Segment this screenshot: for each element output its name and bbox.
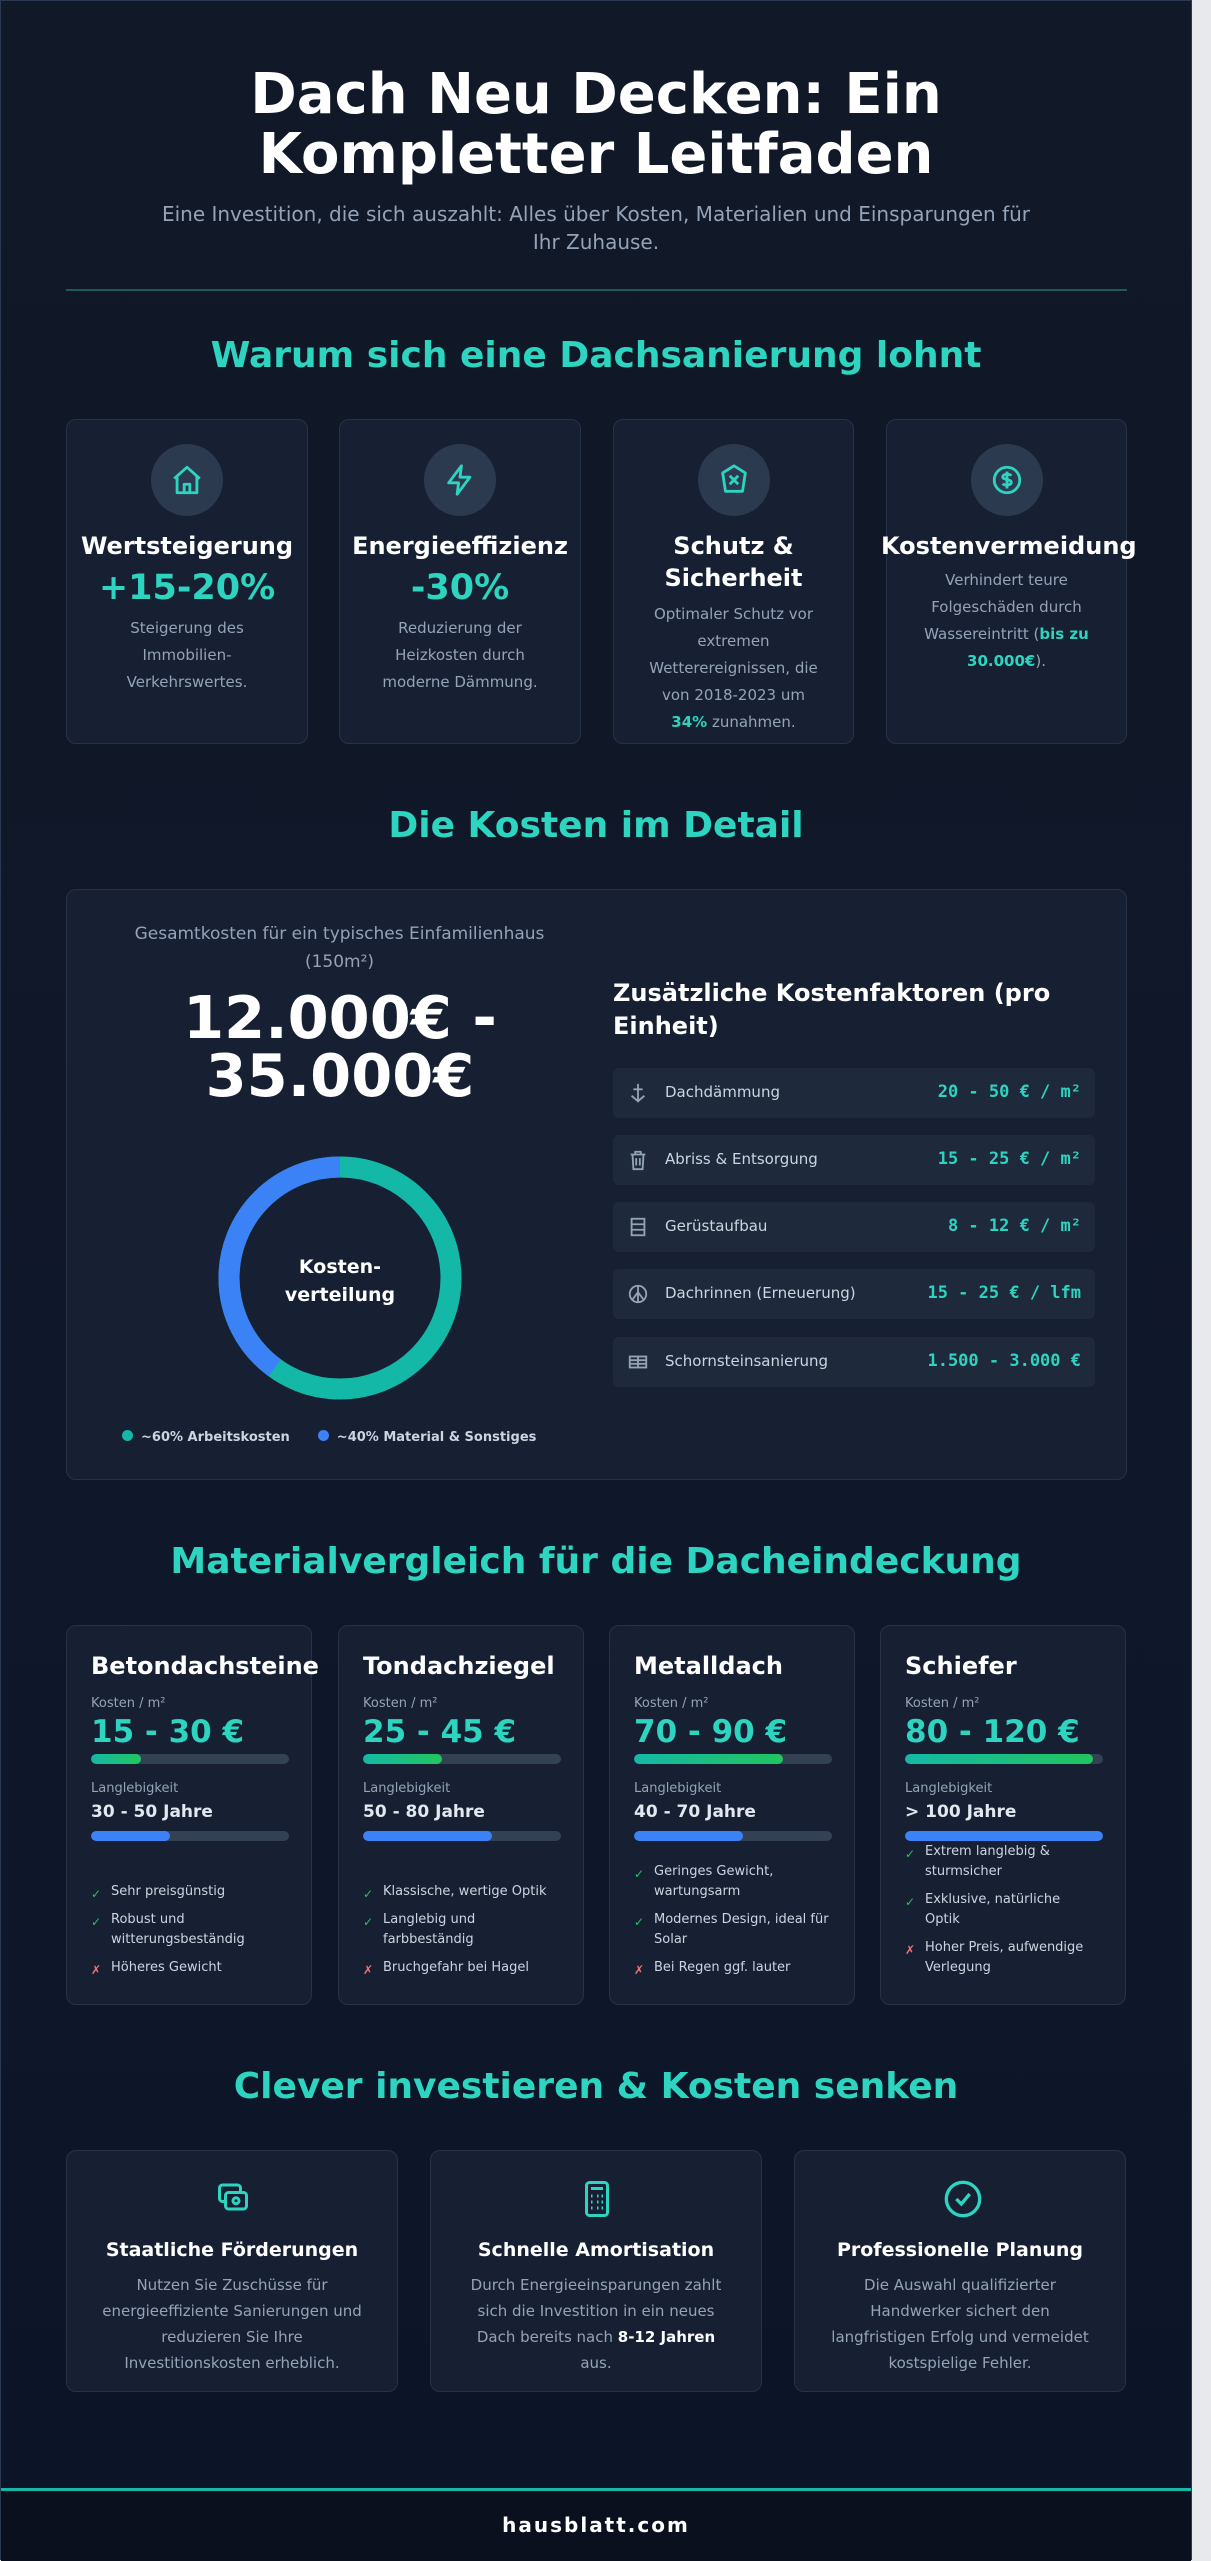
card: Tondachziegel: Kosten / m² bbox=[363, 1696, 437, 1711]
card: Schutz bbox=[613, 419, 854, 744]
card: Schutz: 34% zunahmen. bbox=[671, 713, 796, 731]
card: Wertsteigerung: Steigerung des Immobilien-Verkehrswertes. bbox=[127, 619, 247, 691]
card: Metalldach: Kosten / m² bbox=[634, 1696, 708, 1711]
card: Schiefer: Extrem langlebig & sturmsicher bbox=[925, 1844, 1050, 1879]
row: Abriss: Abriss & Entsorgung bbox=[665, 1150, 818, 1168]
card: Energieeffizienz: Energieeffizienz bbox=[352, 532, 568, 560]
panel: costs bbox=[66, 889, 1127, 1480]
card: Förderungen: Staatliche Förderungen bbox=[106, 2239, 358, 2261]
card: Schiefer: Hoher Preis, aufwendige Verlegung bbox=[925, 1940, 1083, 1975]
card: Energieeffizienz: Reduzierung der Heizkosten durch moderne Dämmung. bbox=[382, 619, 538, 691]
card: Schiefer: ✓ bbox=[905, 1895, 915, 1909]
card: Energieeffizienz bbox=[339, 419, 581, 744]
card: Förderungen: Investitionskosten erheblich. bbox=[124, 2354, 340, 2372]
card: Tondachziegel: ✗ bbox=[363, 1963, 373, 1977]
card: Metalldach bbox=[609, 1625, 855, 2005]
icon: money bbox=[218, 2184, 248, 2210]
card: Tondachziegel: Tondachziegel bbox=[363, 1652, 555, 1680]
card: Betondachsteine: ✓ bbox=[91, 1887, 101, 1901]
card: Tondachziegel: Klassische, wertige Optik bbox=[383, 1884, 546, 1899]
big number: 12.000€ - bbox=[183, 983, 497, 1052]
card: Schiefer: Schiefer bbox=[905, 1652, 1017, 1680]
card: Planung: Professionelle Planung bbox=[837, 2239, 1083, 2261]
card: Förderungen: Nutzen Sie Zuschüsse für energieeffiziente Sanierungen und bbox=[102, 2276, 362, 2320]
card: Amortisation: Schnelle Amortisation bbox=[478, 2239, 714, 2261]
row: Dachdämmung: 20 - 50 € / m² bbox=[938, 1082, 1081, 1102]
row: Schornstein: Schornsteinsanierung bbox=[665, 1352, 828, 1370]
icon: check circle bbox=[944, 2180, 982, 2218]
heading: extra factors: Zusätzliche Kostenfaktoren (pro bbox=[613, 979, 1050, 1007]
row: Dachrinnen: Dachrinnen (Erneuerung) bbox=[665, 1284, 856, 1302]
legend: ~60% Arbeitskosten ~40% Material & Sonstiges bbox=[141, 1430, 536, 1445]
card: Metalldach: Langlebigkeit bbox=[634, 1781, 721, 1796]
icon: dollar bbox=[970, 444, 1042, 516]
title bbox=[250, 62, 942, 187]
icon: bolt bbox=[424, 444, 496, 516]
card: Betondachsteine: Kosten / m² bbox=[91, 1696, 165, 1711]
row: Gerüst bbox=[613, 1202, 1095, 1252]
footer: hausblatt.com bbox=[502, 2513, 690, 2537]
donut chart: verteilung bbox=[285, 1284, 395, 1306]
total costs text: Gesamtkosten für ein typisches Einfamilienhaus (150m²) bbox=[135, 924, 544, 972]
title: Dach Neu Decken: Ein bbox=[250, 62, 942, 127]
card: Schiefer: > 100 Jahre bbox=[905, 1802, 1016, 1822]
card: Metalldach: ✓ bbox=[634, 1867, 644, 1881]
card: Amortisation: Durch Energieeinsparungen zahlt sich die Investition in ein neues Dach bereits nach 8-12 Jahren aus. bbox=[471, 2276, 721, 2372]
card: Betondachsteine: ✗ bbox=[91, 1963, 101, 1977]
card: Schutz: Optimaler Schutz vor extremen Wetterereignissen, die von 2018-2023 um bbox=[649, 605, 818, 704]
row: Schornstein: 1.500 - 3.000 € bbox=[927, 1351, 1081, 1371]
card: Schutz: Schutz & bbox=[673, 532, 794, 560]
card: Schiefer: ✗ bbox=[905, 1943, 915, 1957]
subtitle: Eine Investition, die sich auszahlt: Alles über Kosten, Materialien und Einsparungen für Ihr Zuhause. bbox=[162, 202, 1030, 254]
row: Gerüst: 8 - 12 € / m² bbox=[948, 1216, 1081, 1236]
card: Schiefer: ✓ bbox=[905, 1847, 915, 1861]
card: Metalldach: Bei Regen ggf. lauter bbox=[654, 1960, 790, 1975]
card: Planung: Die Auswahl qualifizierter Handwerker sichert den langfristigen Erfolg und vermeidet kostspielige Fehler. bbox=[831, 2276, 1089, 2372]
heading: extra factors: Einheit) bbox=[613, 1012, 719, 1040]
card: Tondachziegel: Bruchgefahr bei Hagel bbox=[383, 1960, 529, 1975]
row: Gerüst: Gerüstaufbau bbox=[665, 1217, 767, 1235]
card: Metalldach: 70 - 90 € bbox=[634, 1714, 787, 1750]
donut chart: Kosten- bbox=[299, 1256, 381, 1278]
row: Dachrinnen: 15 - 25 € / lfm bbox=[927, 1283, 1081, 1303]
card: Betondachsteine: Langlebigkeit bbox=[91, 1781, 178, 1796]
card: Wertsteigerung bbox=[66, 419, 308, 744]
card: Metalldach: ✓ bbox=[634, 1915, 644, 1929]
card: Tondachziegel: 25 - 45 € bbox=[363, 1714, 516, 1750]
heading: extra factors bbox=[613, 979, 1050, 1040]
title: Kompletter Leitfaden bbox=[259, 122, 933, 187]
row: Abriss bbox=[613, 1135, 1095, 1185]
row: Dachdämmung: Dachdämmung bbox=[665, 1083, 780, 1101]
footer bbox=[1, 2488, 1191, 2561]
card: Amortisation bbox=[430, 2150, 762, 2392]
card: Betondachsteine: 30 - 50 Jahre bbox=[91, 1802, 213, 1822]
card: Kostenvermeidung: Verhindert teure Folgeschäden durch Wassereintritt (bis zu 30.000€). bbox=[924, 571, 1089, 670]
card: Förderungen: reduzieren Sie Ihre bbox=[161, 2328, 303, 2346]
card: Förderungen bbox=[66, 2150, 398, 2392]
row: Dachdämmung bbox=[613, 1068, 1095, 1118]
row: Abriss: 15 - 25 € / m² bbox=[938, 1149, 1081, 1169]
card: Metalldach: Metalldach bbox=[634, 1652, 783, 1680]
card: Tondachziegel bbox=[338, 1625, 584, 2005]
card: Wertsteigerung: +15-20% bbox=[99, 568, 275, 608]
row: Schornstein bbox=[613, 1337, 1095, 1387]
heading: Clever investieren: Clever investieren & Kosten senken bbox=[234, 2066, 958, 2107]
card: Betondachsteine: Höheres Gewicht bbox=[111, 1960, 222, 1975]
card: Metalldach: Geringes Gewicht, wartungsarm bbox=[654, 1864, 773, 1899]
card: Schiefer: Optik bbox=[925, 1912, 960, 1927]
card: Betondachsteine: Robust und witterungsbeständig bbox=[111, 1912, 245, 1947]
card: Schiefer: 80 - 120 € bbox=[905, 1714, 1080, 1750]
card: Tondachziegel: ✓ bbox=[363, 1915, 373, 1929]
card: Metalldach: 40 - 70 Jahre bbox=[634, 1802, 756, 1822]
card: Energieeffizienz: -30% bbox=[411, 568, 509, 608]
card: Tondachziegel: farbbeständig bbox=[383, 1932, 474, 1947]
card: Tondachziegel: Langlebigkeit bbox=[363, 1781, 450, 1796]
card: Metalldach: Modernes Design, ideal für Solar bbox=[654, 1912, 829, 1947]
row: Dachrinnen bbox=[613, 1269, 1095, 1319]
card: Planung bbox=[794, 2150, 1126, 2392]
card: Tondachziegel: 50 - 80 Jahre bbox=[363, 1802, 485, 1822]
card: Schiefer: Kosten / m² bbox=[905, 1696, 979, 1711]
card: Betondachsteine: Sehr preisgünstig bbox=[111, 1884, 225, 1899]
card: Schiefer: Langlebigkeit bbox=[905, 1781, 992, 1796]
card: Kostenvermeidung bbox=[886, 419, 1127, 744]
icon: shield bbox=[698, 444, 770, 516]
card: Betondachsteine: ✓ bbox=[91, 1915, 101, 1929]
big number bbox=[183, 983, 497, 1110]
donut chart bbox=[218, 1156, 462, 1400]
icon: house bbox=[151, 444, 223, 516]
card: Schutz: Sicherheit bbox=[664, 564, 802, 592]
card: Metalldach: ✗ bbox=[634, 1963, 644, 1977]
icon: calculator bbox=[585, 2181, 609, 2217]
big number: 35.000€ bbox=[206, 1041, 474, 1110]
card: Kostenvermeidung: Kostenvermeidung bbox=[881, 532, 1137, 560]
heading: Warum: Warum sich eine Dachsanierung lohnt bbox=[211, 335, 981, 376]
heading: Materialvergleich: Materialvergleich für die Dacheindeckung bbox=[170, 1541, 1022, 1582]
card: Tondachziegel: Langlebig und bbox=[383, 1912, 475, 1927]
card: Wertsteigerung: Wertsteigerung bbox=[81, 532, 293, 560]
card: Tondachziegel: ✓ bbox=[363, 1887, 373, 1901]
card: Betondachsteine: Betondachsteine bbox=[91, 1652, 319, 1680]
card: Schiefer: Exklusive, natürliche bbox=[925, 1892, 1060, 1907]
card: Betondachsteine: 15 - 30 € bbox=[91, 1714, 244, 1750]
card: Schiefer bbox=[880, 1625, 1126, 2005]
card: Betondachsteine bbox=[66, 1625, 312, 2005]
heading: Kosten: Die Kosten im Detail bbox=[388, 805, 804, 846]
